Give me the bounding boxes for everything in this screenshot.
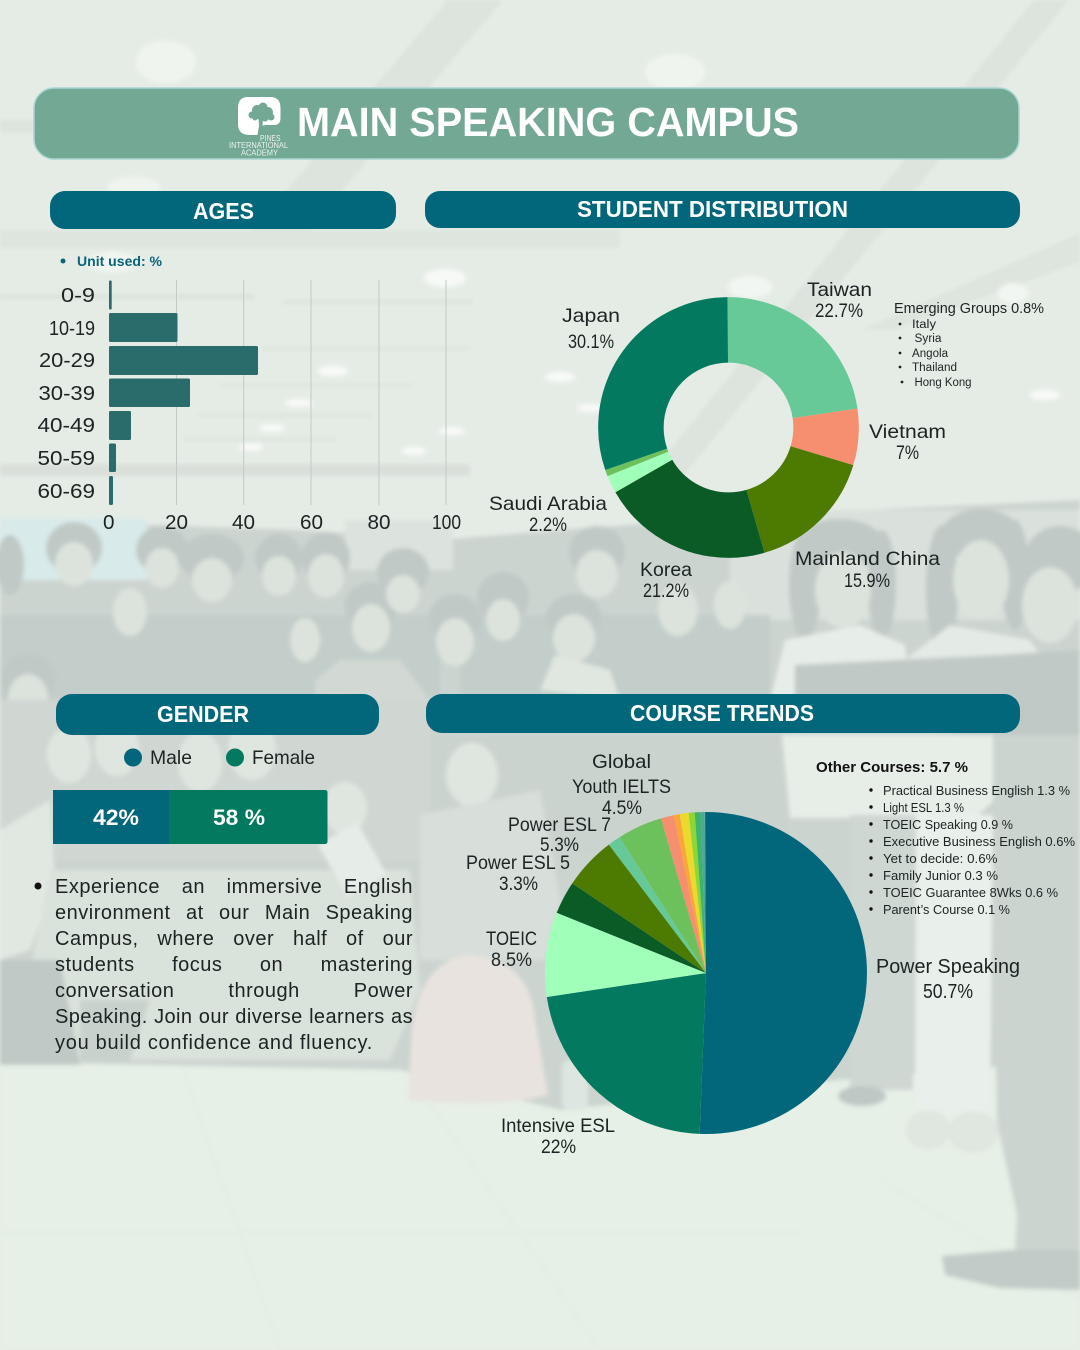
- right leg and shoe: [942, 735, 1080, 1290]
- bar chart: ages: 20: [165, 512, 188, 534]
- stacked bar: gender split: 58 %: [213, 805, 265, 830]
- legend: gender: [124, 747, 315, 769]
- donut labels: Mainland China: [795, 548, 940, 570]
- list: other courses: Parent’s Course 0.1 %: [883, 903, 1010, 917]
- emerging groups list: Emerging Groups 0.8%: [894, 301, 1044, 317]
- list: other courses: Yet to decide: 0.6%: [883, 852, 998, 866]
- pie labels: 50.7%: [923, 981, 973, 1003]
- icon: Pines logo: PINES: [260, 133, 281, 143]
- donut labels: 30.1%: [568, 331, 614, 353]
- shirts: [315, 660, 430, 720]
- donut labels: Korea: [640, 559, 692, 581]
- heading: gender: [56, 694, 379, 735]
- floor: [0, 1060, 1080, 1350]
- pie chart: course trends: [545, 812, 867, 1134]
- legend: gender: Female: [252, 747, 315, 769]
- pie labels: Power ESL 5: [466, 852, 570, 874]
- emerging groups list: Syria: [914, 333, 942, 345]
- pie labels: 8.5%: [491, 949, 532, 971]
- legend: gender: Male: [150, 747, 192, 769]
- heading: ages: [50, 191, 396, 229]
- bar chart: ages: 20-29: [39, 350, 95, 372]
- pie labels: Intensive ESL: [501, 1115, 615, 1137]
- donut labels: 7%: [896, 442, 919, 464]
- stacked bar: gender split: 42%: [93, 805, 139, 830]
- bar chart: ages: 40: [232, 512, 255, 534]
- emerging groups list: Thailand: [912, 362, 957, 374]
- donut labels: [489, 279, 946, 602]
- paragraph: campus description: [55, 876, 413, 1054]
- list: other courses: Family Junior 0.3 %: [883, 869, 998, 883]
- mid zone: [0, 700, 430, 860]
- heading: student distribution: STUDENT DISTRIBUTION: [577, 196, 848, 222]
- bar chart: ages: 0-9: [61, 285, 95, 307]
- pie labels: Global: [592, 751, 651, 773]
- bar chart: ages: [38, 280, 461, 534]
- donut labels: 15.9%: [844, 570, 890, 592]
- heading: course trends: [426, 694, 1020, 733]
- donut labels: 22.7%: [815, 300, 863, 322]
- emerging groups list: Angola: [912, 348, 949, 360]
- bar chart: ages: 60-69: [38, 481, 95, 503]
- pie labels: 4.5%: [602, 797, 642, 819]
- bullet for paragraph: [34, 882, 42, 890]
- pie labels: Power ESL 7: [508, 814, 611, 836]
- list: other courses: TOEIC Speaking 0.9 %: [883, 818, 1013, 832]
- paragraph: campus description: students focus on mastering: [55, 954, 413, 976]
- paragraph: campus description: Speaking. Join our diverse learners as: [55, 1006, 413, 1028]
- bar chart: ages: 100: [432, 512, 461, 534]
- crowd base: [0, 500, 1080, 1110]
- pie labels: 5.3%: [540, 834, 579, 856]
- donut labels: Japan: [562, 305, 620, 327]
- title banner: [34, 88, 1019, 159]
- list: other courses: TOEIC Guarantee 8Wks 0.6 %: [883, 886, 1058, 900]
- paragraph: campus description: Campus, where over half of our: [55, 928, 413, 950]
- emerging groups list: [894, 301, 1044, 389]
- donut labels: Vietnam: [869, 421, 946, 443]
- heading: gender: GENDER: [157, 701, 249, 727]
- list: other courses: Practical Business English 1.3 %: [883, 784, 1070, 798]
- bar chart: ages: 40-49: [38, 415, 95, 437]
- icon: Pines logo: [229, 97, 288, 158]
- pie labels: 3.3%: [499, 873, 538, 895]
- bar chart: ages: 60: [300, 512, 323, 534]
- paragraph: campus description: conversation through Power: [55, 980, 413, 1002]
- list: other courses: Light ESL 1.3 %: [883, 801, 964, 815]
- icon: Pines logo: ACADEMY: [241, 148, 278, 158]
- heading: student distribution: [425, 191, 1020, 228]
- title text: MAIN SPEAKING CAMPUS: [297, 99, 799, 145]
- donut chart: student distribution: [598, 297, 859, 558]
- list: other courses: Other Courses: 5.7 %: [816, 759, 968, 776]
- icon: Pines logo: INTERNATIONAL: [229, 140, 288, 150]
- stacked bar: gender split: [53, 790, 328, 844]
- heading: ages: AGES: [193, 198, 254, 224]
- bar chart: ages: 30-39: [38, 383, 95, 405]
- bar chart: ages: 50-59: [38, 448, 95, 470]
- heading: course trends: COURSE TRENDS: [630, 700, 814, 726]
- donut labels: 21.2%: [643, 580, 689, 602]
- emerging groups list: Italy: [912, 319, 936, 331]
- list: other courses: Executive Business English 0.6%: [883, 835, 1075, 849]
- pie labels: Power Speaking: [876, 956, 1020, 978]
- bar chart: ages: 0: [103, 512, 114, 534]
- emerging groups list: Hong Kong: [914, 377, 972, 389]
- pie labels: [466, 751, 1020, 1158]
- paragraph: campus description: environment at our Main Speaking: [55, 902, 413, 924]
- list: other courses: [816, 759, 1075, 917]
- pie labels: Youth IELTS: [572, 776, 671, 798]
- paragraph: campus description: you build confidence and fluency.: [55, 1032, 373, 1054]
- donut labels: Saudi Arabia: [489, 493, 607, 515]
- pie labels: 22%: [541, 1136, 576, 1158]
- hair and dark clothes: [0, 509, 1080, 702]
- bar chart: ages: 10-19: [49, 318, 95, 340]
- donut labels: Taiwan: [807, 279, 872, 301]
- bar chart: ages: 80: [368, 512, 390, 534]
- pie labels: TOEIC: [486, 928, 537, 950]
- donut labels: 2.2%: [529, 514, 567, 536]
- paragraph: campus description: Experience an immersive English: [55, 876, 413, 898]
- unit note: Unit used: %: [77, 253, 163, 269]
